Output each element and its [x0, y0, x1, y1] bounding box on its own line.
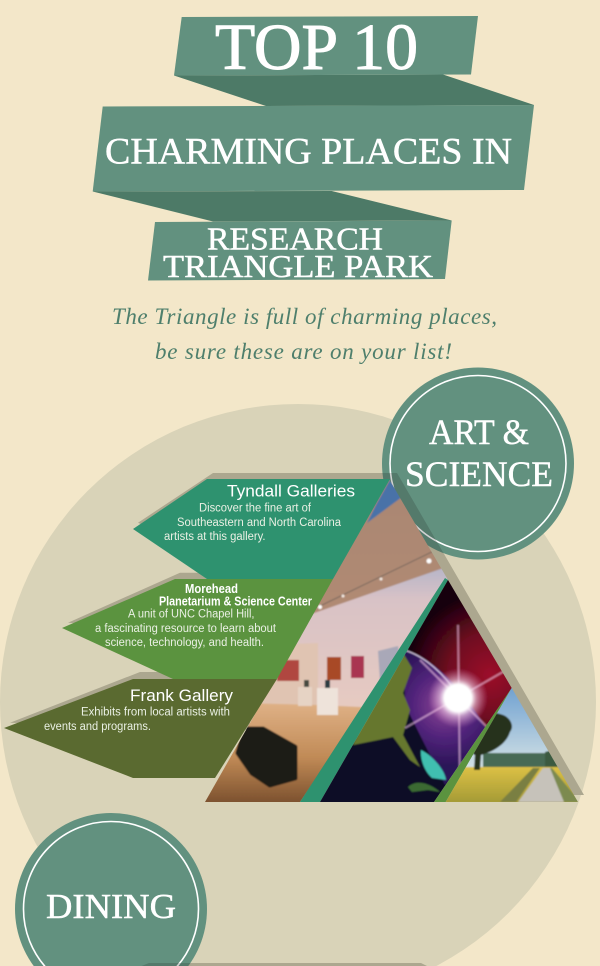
ribbon fold: lower	[93, 191, 452, 222]
label body: artists at this gallery.	[164, 531, 266, 543]
purple atmosphere	[404, 650, 490, 785]
islands	[421, 750, 446, 780]
label shape: tyndall galleries	[133, 479, 390, 579]
title: research: RESEARCH	[207, 220, 383, 256]
pedestals	[298, 687, 312, 706]
title: top 10: TOP 10	[215, 11, 418, 84]
road	[518, 768, 564, 802]
label heading: Tyndall Galleries	[227, 482, 355, 501]
ribbon fold: upper	[174, 74, 534, 106]
label heading	[159, 582, 312, 608]
tree line	[483, 753, 559, 768]
floor	[205, 703, 362, 802]
skylight	[367, 480, 402, 523]
photo: space view	[320, 580, 512, 802]
label shape: frank gallery	[4, 679, 277, 778]
ribbon band: top 10	[174, 16, 478, 76]
label body: Exhibits from local artists with	[81, 707, 230, 719]
label body	[44, 707, 230, 733]
tagline	[112, 304, 497, 364]
badge text: science: SCIENCE	[405, 454, 553, 494]
star rays	[404, 624, 504, 767]
label heading: Frank Gallery	[130, 686, 233, 705]
circle badge: dining	[15, 813, 207, 966]
label body	[164, 503, 342, 543]
badge text: art and: ART &	[429, 412, 529, 452]
star flare	[428, 668, 488, 728]
photo: gallery interior	[205, 480, 448, 802]
title ribbon	[93, 11, 534, 284]
bench	[238, 729, 295, 785]
label heading: Morehead	[185, 582, 238, 596]
tagline: The Triangle is full of charming places,	[112, 304, 497, 329]
label body: events and programs.	[44, 721, 151, 733]
label shape: morehead planetarium	[62, 579, 333, 679]
tree	[468, 713, 512, 770]
label body: Discover the fine art of	[199, 503, 312, 515]
red sky	[408, 580, 512, 728]
large background circle	[0, 404, 596, 966]
title: charming places in: CHARMING PLACES IN	[105, 132, 512, 172]
circle badge: art and science	[382, 368, 574, 560]
label body: Southeastern and North Carolina	[177, 517, 342, 529]
ribbon band: research triangle park	[148, 220, 452, 280]
label body: science, technology, and health.	[105, 637, 264, 649]
divider: thin green band	[434, 688, 512, 802]
label body	[95, 609, 277, 649]
label body: A unit of UNC Chapel Hill,	[128, 609, 254, 621]
badge text: dining: DINING	[46, 887, 176, 926]
grass verge	[500, 768, 540, 802]
divider: green band	[300, 578, 448, 802]
side wall	[262, 643, 318, 705]
title: triangle park: TRIANGLE PARK	[163, 248, 433, 284]
photo: country road landscape	[440, 685, 580, 803]
next section shadow	[142, 963, 427, 966]
label body: a fascinating resource to learn about	[95, 623, 277, 635]
artwork	[277, 660, 299, 681]
back wall	[296, 568, 448, 708]
triangle shadow	[10, 473, 584, 795]
label heading: Planetarium & Science Center	[159, 594, 312, 608]
ribbon band: charming places	[93, 105, 534, 192]
track light rail	[321, 551, 432, 606]
field	[440, 767, 580, 803]
land	[353, 653, 420, 767]
planet limb	[406, 649, 452, 686]
tagline: be sure these are on your list!	[155, 339, 452, 364]
